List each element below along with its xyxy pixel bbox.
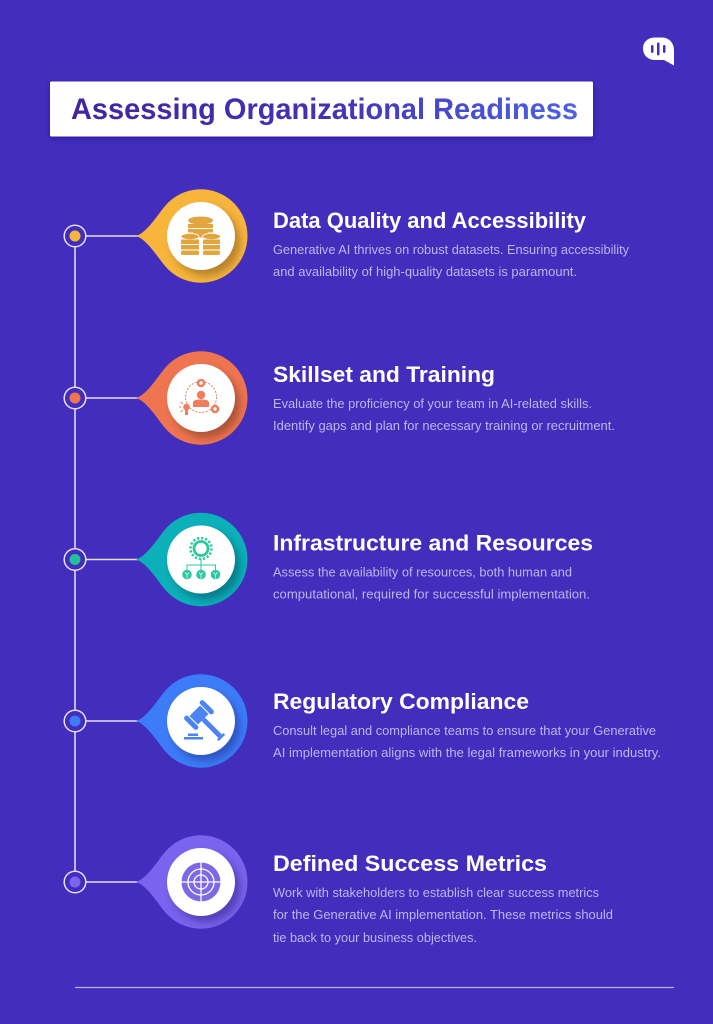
pin badge [136,351,247,445]
pin badge [136,835,247,929]
connector node [64,225,138,247]
text block: Defined Success Metrics [273,851,547,876]
title: Assessing Organizational Readiness [71,93,578,126]
icon: target [181,862,221,902]
icon: person with gears and bulb [179,380,218,415]
text block: tie back to your business objectives. [273,930,477,945]
text block [273,530,593,602]
item: skillset [64,351,615,445]
text block [273,362,615,433]
text block: Identify gaps and plan for necessary training or recruitment. [273,418,615,433]
text block: for the Generative AI implementation. These metrics should [273,907,613,922]
connector node [64,387,138,409]
text block: and availability of high-quality datasets is paramount. [273,264,577,279]
connector node [64,710,138,732]
text block: Regulatory Compliance [273,689,529,714]
item: data quality [64,189,630,283]
icon: gavel [183,699,232,748]
text block: Infrastructure and Resources [273,530,593,556]
text block: AI implementation aligns with the legal frameworks in your industry. [273,745,661,760]
item: infrastructure [64,513,593,606]
icon: gear hierarchy [182,538,220,579]
text block: Consult legal and compliance teams to ensure that your Generative [273,723,656,738]
text block [273,208,630,279]
logo: speech bubble [643,38,674,66]
text block: Skillset and Training [273,362,495,387]
text block: Evaluate the proficiency of your team in AI-related skills. [273,396,592,411]
pin badge [136,189,247,283]
text block: Data Quality and Accessibility [273,208,586,233]
pin badge [136,513,247,606]
text block [273,851,613,945]
text block: Assess the availability of resources, both human and [273,564,572,580]
pin badge [136,674,247,768]
item: regulatory [64,674,661,768]
text block: Generative AI thrives on robust datasets. Ensuring accessibility [273,242,630,257]
title [50,82,593,136]
connector node [64,871,138,893]
text block [273,689,661,760]
text block: computational, required for successful implementation. [273,586,590,602]
footer rule [75,986,674,988]
connector node [64,549,138,570]
item: success metrics [64,835,613,945]
icon: database stacks [181,216,220,255]
timeline spine [74,236,76,882]
text block: Work with stakeholders to establish clear success metrics [273,885,599,900]
